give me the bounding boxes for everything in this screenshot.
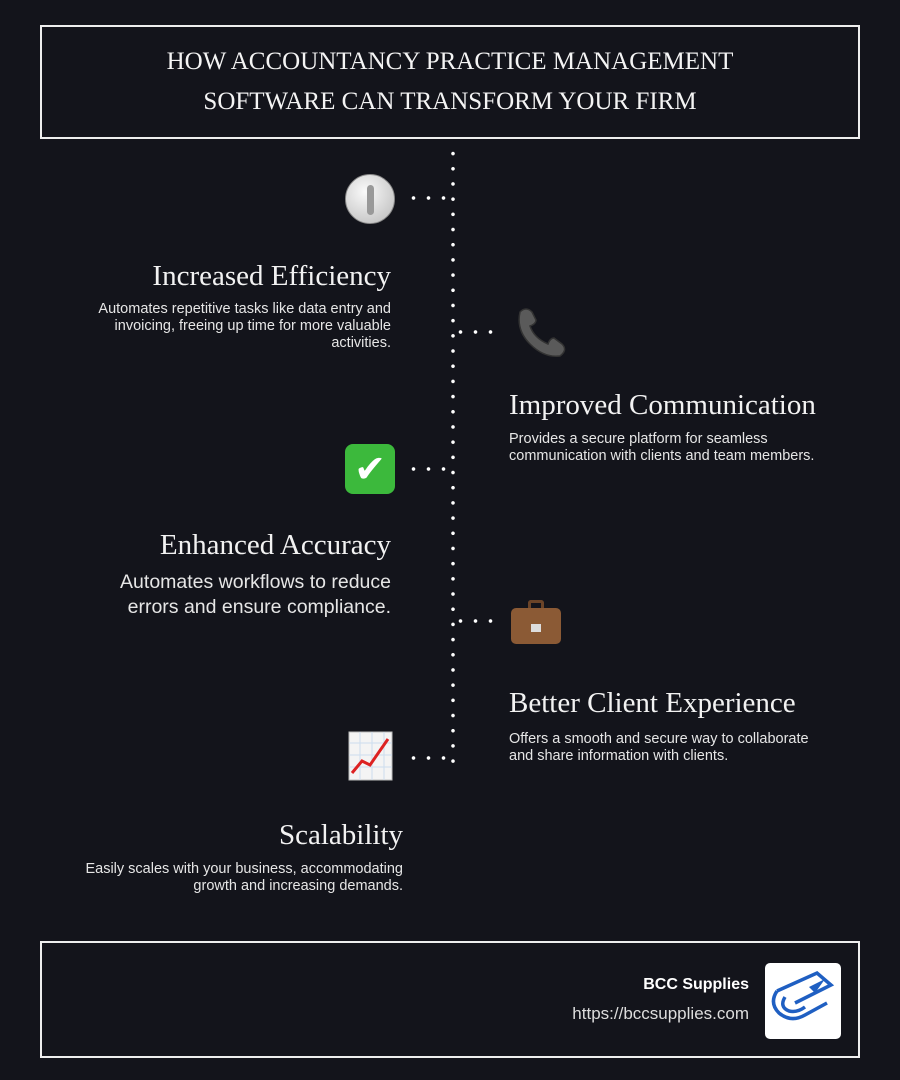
connector 1 bbox=[406, 196, 454, 200]
timeline line bbox=[451, 146, 455, 766]
heading: Increased Efficiency bbox=[152, 260, 391, 292]
text: Provides a secure platform for seamless bbox=[509, 431, 768, 447]
connector 5 bbox=[406, 756, 454, 760]
item: Increased Efficiency bbox=[98, 260, 391, 351]
connector 4 bbox=[453, 619, 503, 623]
icon: timer bbox=[345, 174, 395, 224]
connector 2 bbox=[453, 330, 503, 334]
heading: Better Client Experience bbox=[509, 687, 796, 719]
text: Automates workflows to reduce bbox=[120, 571, 391, 593]
heading: Improved Communication bbox=[509, 389, 816, 421]
footer bbox=[40, 941, 860, 1058]
icon: briefcase bbox=[511, 600, 561, 644]
text: and share information with clients. bbox=[509, 748, 728, 764]
text: Automates repetitive tasks like data entry and bbox=[98, 301, 391, 317]
text: errors and ensure compliance. bbox=[128, 596, 391, 618]
connector 3 bbox=[406, 467, 454, 471]
text bbox=[85, 861, 403, 894]
heading: Enhanced Accuracy bbox=[160, 529, 391, 561]
icon: check bbox=[345, 444, 395, 494]
title bbox=[40, 25, 860, 139]
text: activities. bbox=[331, 335, 391, 351]
text bbox=[509, 731, 809, 764]
icon: phone bbox=[518, 308, 566, 357]
heading: Scalability bbox=[279, 819, 403, 851]
text: Easily scales with your business, accommodating bbox=[85, 861, 403, 877]
logo bbox=[765, 963, 841, 1039]
text bbox=[509, 431, 814, 464]
text bbox=[120, 571, 391, 618]
text: invoicing, freeing up time for more valuable bbox=[115, 318, 391, 334]
text: Offers a smooth and secure way to collaborate bbox=[509, 731, 809, 747]
icon: check: ✔ bbox=[354, 447, 386, 491]
item: Better Client Experience bbox=[509, 687, 809, 764]
url: https://bccsupplies.com bbox=[572, 1004, 749, 1023]
title: HOW ACCOUNTANCY PRACTICE MANAGEMENT bbox=[167, 48, 733, 75]
brand name: BCC Supplies bbox=[643, 976, 749, 993]
text bbox=[98, 301, 391, 351]
item: Improved Communication bbox=[509, 389, 816, 464]
text: growth and increasing demands. bbox=[193, 878, 403, 894]
item: Scalability bbox=[85, 819, 403, 894]
text: communication with clients and team members. bbox=[509, 448, 814, 464]
item: Enhanced Accuracy bbox=[120, 529, 391, 618]
title: SOFTWARE CAN TRANSFORM YOUR FIRM bbox=[203, 88, 697, 115]
icon: chart bbox=[348, 732, 392, 780]
